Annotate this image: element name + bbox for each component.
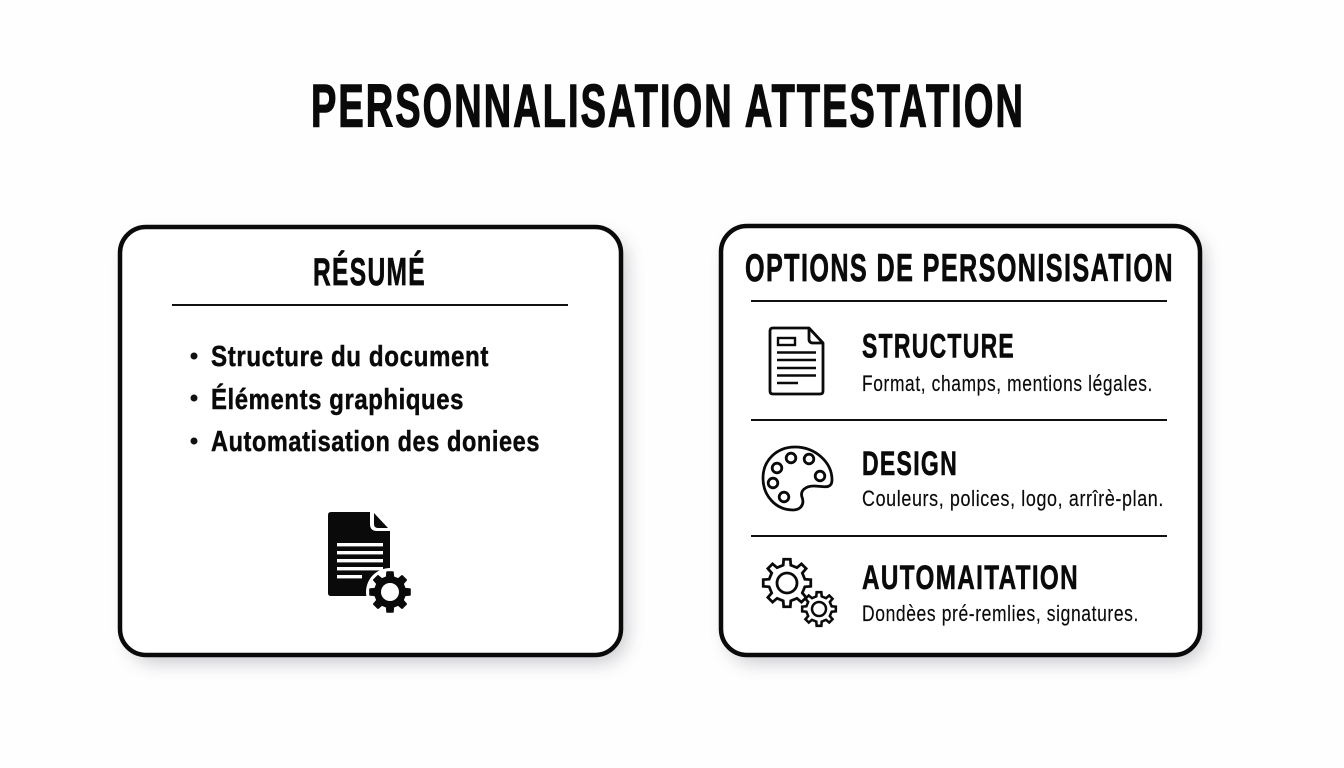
panel: résumé [120,227,627,663]
option: structure: Format, champs, mentions légales. [862,371,1153,396]
heading: résumé: RÉSUMÉ [313,250,426,294]
option: automaitation: AUTOMAITATION [862,559,1079,597]
option: structure: STRUCTURE [862,328,1015,366]
option: automaitation: Dondèes pré-remlies, signatures. [862,601,1139,626]
option: design [763,445,1164,511]
bullet list [190,341,540,458]
bullet list: Structure du document [211,341,489,373]
icon: document with gear [328,512,414,616]
icon: document outline [770,328,823,394]
option: structure [770,328,1153,396]
icon: gears outline [763,559,836,626]
icon: palette [763,447,832,510]
bullet list: Éléments graphiques [211,382,464,416]
option: design: DESIGN [862,445,958,483]
panel: options de personisisation [721,226,1205,663]
option: design: Couleurs, polices, logo, arrîrè-plan. [862,486,1164,511]
option: automaitation [763,559,1139,626]
bullet list: Automatisation des doniees [211,426,540,458]
